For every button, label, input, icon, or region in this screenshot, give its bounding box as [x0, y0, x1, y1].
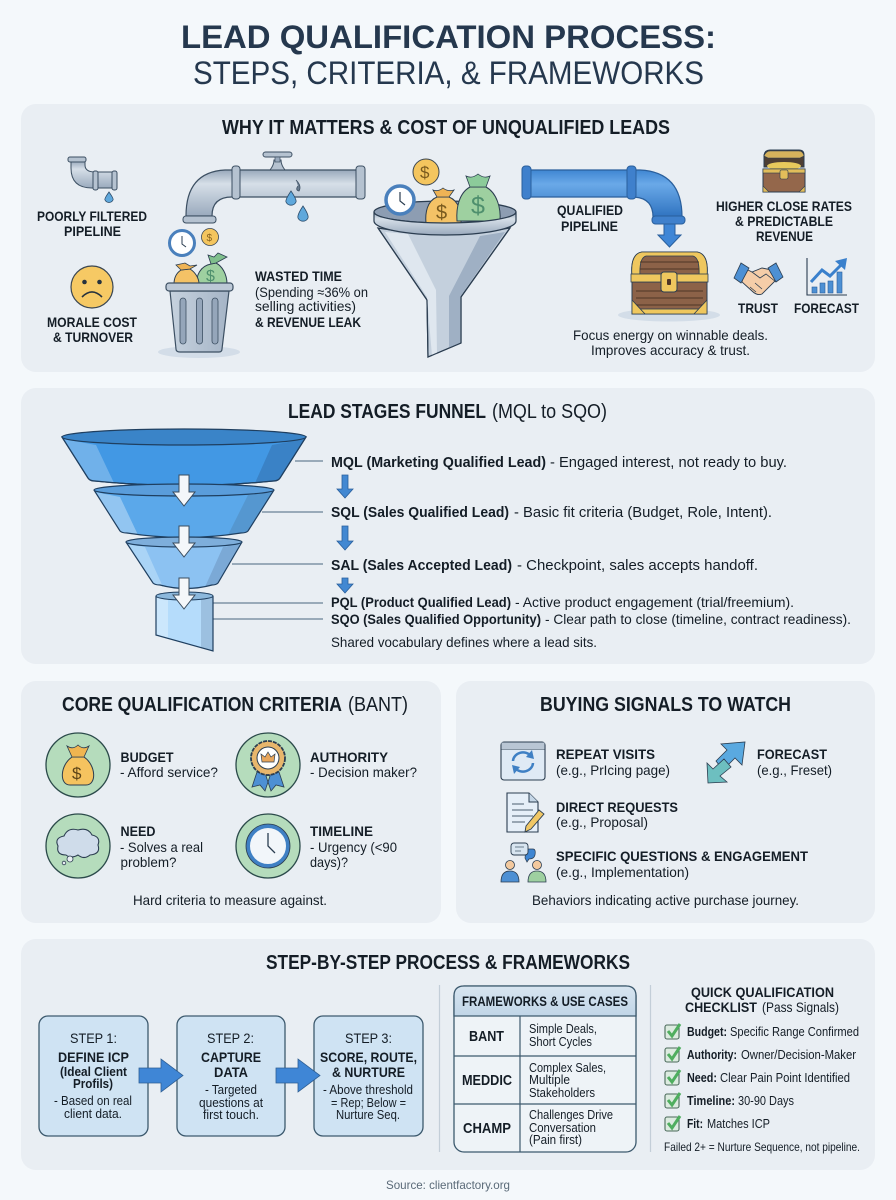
- heading: lead stages: LEAD STAGES FUNNEL: [288, 401, 486, 423]
- criterion: need: - Solves a real: [120, 839, 203, 855]
- step 2: questions at: [199, 1095, 263, 1110]
- heading: process: STEP-BY-STEP PROCESS & FRAMEWORKS: [266, 952, 630, 974]
- table: frameworks and use cases: MEDDIC: [462, 1072, 512, 1089]
- stage: PQL: PQL (Product Qualified Lead): [331, 594, 511, 610]
- arrow: MQL to SQL: [337, 475, 353, 498]
- step 1: Profils): [73, 1076, 113, 1091]
- checklist heading: [685, 984, 839, 1015]
- arrow: funnel down 2: [173, 526, 195, 557]
- signal: specific questions: (e.g., Implementation): [556, 864, 689, 880]
- stage: SQL: [331, 504, 772, 521]
- check: authority: Owner/Decision-Maker: [741, 1047, 857, 1062]
- step 1: STEP 1:: [70, 1030, 117, 1046]
- step 3: [314, 1016, 423, 1136]
- check: timeline: 30-90 Days: [738, 1093, 794, 1108]
- check: fit: Matches ICP: [707, 1116, 770, 1131]
- text: failed note: Failed 2+ = Nurture Sequence, not pipeline.: [664, 1140, 860, 1154]
- label: higher close rates: REVENUE: [756, 228, 813, 244]
- checklist heading: QUICK QUALIFICATION: [691, 984, 834, 1000]
- icon: central funnel with money: [374, 159, 516, 357]
- table: frameworks and use cases: Complex Sales,: [529, 1060, 606, 1075]
- source: Source: clientfactory.org: [386, 1178, 510, 1192]
- icon: budget money bag: $: [72, 764, 82, 783]
- icon: trash can with money and time: $: [206, 233, 212, 244]
- label: higher close rates: HIGHER CLOSE RATES: [716, 198, 852, 214]
- arrow: SAL to PQL: [337, 578, 353, 593]
- step 1: (Ideal Client: [60, 1064, 128, 1079]
- stage: MQL: MQL (Marketing Qualified Lead): [331, 454, 546, 471]
- step 1: [39, 1016, 148, 1136]
- icon: trash can with money and time: [158, 228, 240, 358]
- checklist heading: (Pass Signals): [762, 999, 839, 1015]
- stage: SQL: SQL (Sales Qualified Lead): [331, 504, 509, 521]
- step 2: [177, 1016, 285, 1136]
- label: morale cost: & TURNOVER: [53, 329, 133, 345]
- label: poorly filtered pipeline: PIPELINE: [64, 223, 121, 239]
- step 3: SCORE, ROUTE,: [320, 1049, 417, 1065]
- check: need: [665, 1070, 850, 1085]
- signal: forecast: FORECAST: [757, 746, 827, 762]
- arrow: funnel down 1: [173, 475, 195, 506]
- funnel layer: SQL: [94, 484, 274, 538]
- signal: repeat visits: [556, 746, 670, 778]
- step 2: - Targeted: [205, 1082, 257, 1097]
- table: frameworks and use cases: Multiple: [529, 1072, 570, 1087]
- label: higher close rates: & PREDICTABLE: [735, 213, 833, 229]
- check: budget: [665, 1024, 859, 1039]
- signal: forecast: (e.g., Freset): [757, 762, 832, 778]
- criterion: timeline: [310, 823, 397, 870]
- check: timeline: [665, 1093, 794, 1108]
- label: morale cost: [47, 314, 137, 345]
- heading: BANT: CORE QUALIFICATION CRITERIA: [62, 694, 342, 716]
- arrow: SQL to SAL: [337, 526, 353, 550]
- text: wasted time: WASTED TIME: [255, 268, 342, 284]
- label: forecast: FORECAST: [794, 300, 859, 316]
- stage: SAL: [331, 557, 758, 574]
- criterion: budget: - Afford service?: [120, 764, 218, 780]
- heading: why it matters: WHY IT MATTERS & COST OF UNQUALIFIED LEADS: [222, 117, 670, 139]
- table: frameworks and use cases: Simple Deals,: [529, 1021, 597, 1036]
- check: fit: Fit:: [687, 1116, 703, 1131]
- text: wasted time: & REVENUE LEAK: [255, 314, 361, 330]
- check: need: Clear Pain Point Identified: [720, 1070, 850, 1085]
- check: fit: [665, 1116, 770, 1131]
- step 3: Nurture Seq.: [336, 1107, 400, 1122]
- label: morale cost: MORALE COST: [47, 314, 137, 330]
- stage: SQL: - Basic fit criteria (Budget, Role, Intent).: [514, 504, 772, 521]
- stage: SQO: [331, 611, 851, 627]
- table: frameworks and use cases: CHAMP: [463, 1120, 511, 1137]
- step 1: - Based on real: [54, 1093, 132, 1108]
- check: authority: Authority:: [687, 1047, 737, 1062]
- icon: rising chart: [807, 258, 847, 295]
- icon: large treasure chest: [618, 252, 720, 322]
- stage: SQO: SQO (Sales Qualified Opportunity): [331, 611, 541, 627]
- step 3: & NURTURE: [332, 1064, 405, 1080]
- step 3: = Rep; Below =: [331, 1095, 406, 1110]
- criterion: timeline: days)?: [310, 854, 348, 870]
- criterion: authority: AUTHORITY: [310, 749, 389, 765]
- checklist: [664, 984, 860, 1154]
- check: budget: Budget:: [687, 1024, 727, 1039]
- title: [181, 19, 716, 91]
- funnel layer: PQL and SQO: [156, 592, 213, 651]
- criterion: timeline: TIMELINE: [310, 823, 373, 839]
- stage: PQL: [331, 594, 794, 610]
- table: frameworks and use cases: FRAMEWORKS & USE CASES: [462, 993, 628, 1009]
- step 3: STEP 3:: [345, 1030, 392, 1046]
- step 2: DATA: [214, 1064, 248, 1080]
- text: wasted time: selling activities): [255, 298, 356, 314]
- signal: direct requests: DIRECT REQUESTS: [556, 799, 678, 815]
- criterion: need: NEED: [120, 823, 156, 839]
- panel: buying signals: [456, 681, 875, 923]
- criterion: timeline: - Urgency (<90: [310, 839, 397, 855]
- text: wasted time: (Spending ≈36% on: [255, 284, 368, 300]
- icon: central funnel with money: $: [471, 192, 485, 220]
- stage: SAL: - Checkpoint, sales accepts handoff.: [517, 557, 758, 574]
- label: qualified pipeline: QUALIFIED: [557, 202, 623, 218]
- stage: PQL: - Active product engagement (trial/freemium).: [515, 594, 794, 610]
- signal: direct requests: [556, 799, 678, 830]
- text: behaviors: Behaviors indicating active purchase journey.: [532, 892, 799, 908]
- panel: core qualification criteria: [21, 681, 441, 923]
- panel: step-by-step process: [21, 939, 875, 1170]
- icon: browser refresh: [501, 742, 545, 780]
- icon: central funnel with money: $: [436, 202, 447, 224]
- table: frameworks and use cases: Stakeholders: [529, 1085, 595, 1100]
- criterion: budget: [120, 749, 218, 780]
- chart: stacked funnel: [62, 429, 306, 651]
- icon: small open treasure chest: [763, 150, 805, 192]
- criterion: need: [120, 823, 203, 870]
- funnel layer: SAL: [126, 537, 242, 588]
- text: focus energy: Improves accuracy & trust.: [591, 342, 750, 358]
- arrow: step 1 to step 2: [139, 1059, 183, 1092]
- icon: document and pen: [507, 793, 544, 832]
- step 2: STEP 2:: [207, 1030, 254, 1046]
- label: qualified pipeline: PIPELINE: [561, 218, 618, 234]
- check: budget: Specific Range Confirmed: [730, 1024, 859, 1039]
- arrow: step 2 to step 3: [276, 1059, 320, 1092]
- icon: double arrow: [707, 742, 745, 783]
- criterion: authority: - Decision maker?: [310, 764, 417, 780]
- icon: budget money bag: [46, 733, 110, 797]
- icon: central funnel with money: $: [420, 163, 430, 182]
- table: frameworks and use cases: [454, 986, 636, 1152]
- table: frameworks and use cases: BANT: [469, 1028, 504, 1045]
- stage: MQL: - Engaged interest, not ready to buy.: [550, 454, 787, 471]
- icon: trash can with money and time: $: [206, 268, 215, 285]
- signal: forecast: [757, 746, 832, 778]
- icon: small leaking pipe: [68, 157, 117, 202]
- funnel layer: MQL: [62, 429, 306, 486]
- panel: why it matters: [21, 104, 875, 372]
- heading: BANT: (BANT): [348, 694, 408, 716]
- step 3: - Above threshold: [323, 1082, 413, 1097]
- text: wasted time: [255, 268, 368, 330]
- step 2: CAPTURE: [201, 1049, 261, 1065]
- panel: lead stages funnel: [21, 388, 875, 664]
- table: frameworks and use cases: Short Cycles: [529, 1034, 592, 1049]
- table: frameworks and use cases: Challenges Drive: [529, 1107, 613, 1122]
- label: trust: TRUST: [738, 300, 778, 316]
- signal: specific questions: SPECIFIC QUESTIONS & ENGAGEMENT: [556, 848, 808, 864]
- step 2: first touch.: [203, 1107, 259, 1122]
- arrow: funnel down 3: [173, 578, 195, 609]
- label: poorly filtered pipeline: [37, 208, 147, 239]
- icon: timeline clock: [236, 814, 300, 878]
- criterion: authority: [310, 749, 417, 780]
- checklist heading: CHECKLIST: [685, 999, 757, 1015]
- heading: lead stages: (MQL to SQO): [492, 401, 607, 423]
- check: authority: [665, 1047, 857, 1062]
- text: focus energy: [573, 327, 768, 358]
- step 1: DEFINE ICP: [58, 1049, 129, 1065]
- table: frameworks and use cases: Conversation: [529, 1120, 596, 1135]
- text: shared vocabulary: Shared vocabulary defines where a lead sits.: [331, 634, 597, 650]
- icon: need thought cloud: [46, 814, 110, 878]
- label: poorly filtered pipeline: POORLY FILTERED: [37, 208, 147, 224]
- icon: people talking: [501, 843, 546, 882]
- text: hard criteria: Hard criteria to measure against.: [133, 892, 327, 908]
- icon: authority medal: [236, 733, 300, 797]
- criterion: budget: BUDGET: [120, 749, 174, 765]
- signal: direct requests: (e.g., Proposal): [556, 814, 648, 830]
- icon: leaking faucet pipe: [183, 152, 365, 223]
- icon: sad face: [71, 266, 113, 308]
- stage: SAL: SAL (Sales Accepted Lead): [331, 557, 512, 574]
- signal: repeat visits: (e.g., PrIcing page): [556, 762, 670, 778]
- signal: specific questions: [556, 848, 808, 880]
- check: timeline: Timeline:: [687, 1093, 735, 1108]
- text: focus energy: Focus energy on winnable deals.: [573, 327, 768, 343]
- leader lines: [213, 461, 323, 619]
- criterion: need: problem?: [120, 854, 177, 870]
- heading: buying signals: BUYING SIGNALS TO WATCH: [540, 694, 791, 716]
- step 1: client data.: [64, 1106, 122, 1121]
- stage: MQL: [331, 454, 787, 471]
- check: need: Need:: [687, 1070, 717, 1085]
- stage: SQO: - Clear path to close (timeline, contract readiness).: [545, 611, 851, 627]
- title: STEPS, CRITERIA, & FRAMEWORKS: [193, 55, 704, 91]
- table: frameworks and use cases: (Pain first): [529, 1132, 582, 1147]
- title: LEAD QUALIFICATION PROCESS:: [181, 19, 716, 55]
- icon: handshake: [734, 263, 783, 295]
- signal: repeat visits: REPEAT VISITS: [556, 746, 655, 762]
- label: higher close rates: [716, 198, 852, 244]
- icon: blue qualified pipe: [522, 166, 685, 247]
- label: qualified pipeline: [557, 202, 623, 234]
